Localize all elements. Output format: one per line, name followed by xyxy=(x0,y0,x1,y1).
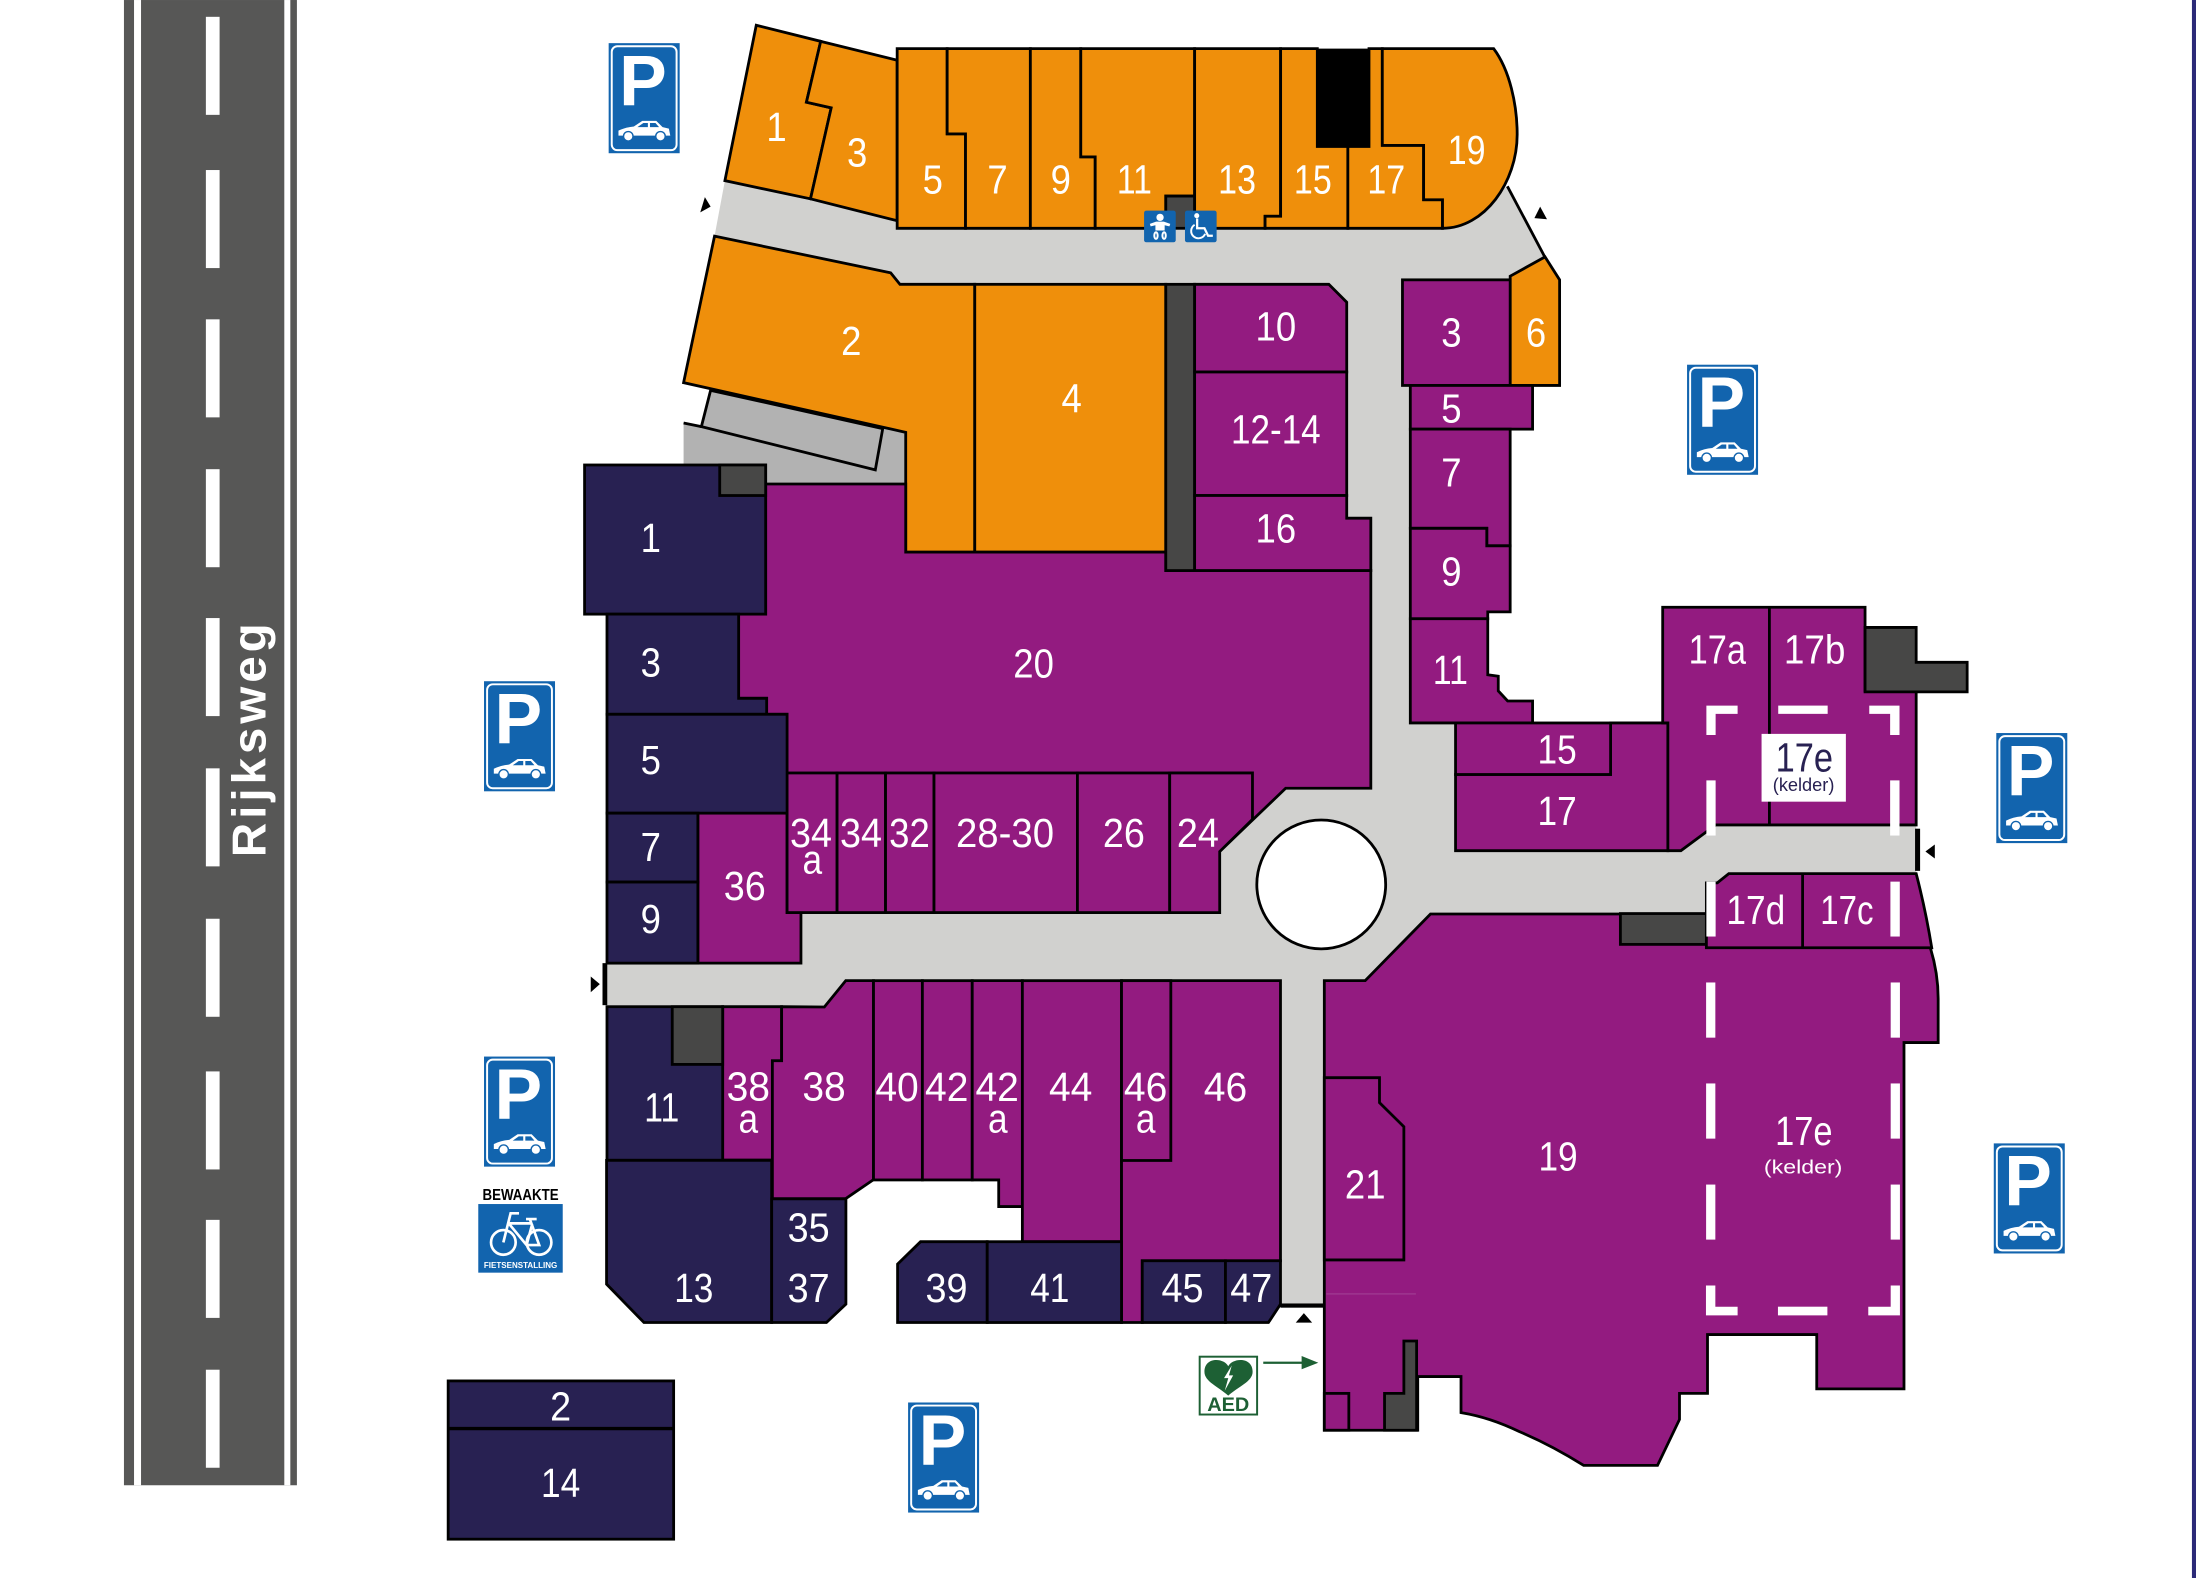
unit 42a xyxy=(972,981,1022,1207)
parking sign 7 xyxy=(908,1401,979,1513)
unit 7 west: 7 xyxy=(641,824,661,870)
small unit south xyxy=(1324,1393,1349,1430)
unit 5 east xyxy=(1410,385,1533,431)
unit 4 xyxy=(975,284,1166,552)
unit 21 xyxy=(1324,1078,1404,1260)
unit 15 east xyxy=(1456,723,1611,774)
unit 10 xyxy=(1195,284,1347,372)
unit 9 east: 9 xyxy=(1441,548,1462,594)
parking sign 5: P xyxy=(2007,731,2054,811)
unit 12-14: 12-14 xyxy=(1231,406,1321,452)
unit 9: 9 xyxy=(1051,156,1071,202)
parking sign 4: P xyxy=(495,1055,542,1135)
unit 11: 11 xyxy=(1117,156,1152,202)
AED sign: AED xyxy=(1207,1395,1249,1416)
unit 15: 15 xyxy=(1294,156,1332,202)
unit 39 xyxy=(898,1242,987,1323)
service block xyxy=(720,465,766,496)
faint seam xyxy=(1326,1293,1416,1295)
unit 3: 3 xyxy=(847,129,867,175)
unit 38 xyxy=(772,981,873,1199)
page edge line xyxy=(2192,0,2196,1578)
label box: 17e basement north xyxy=(1762,734,1846,802)
unit 11 east xyxy=(1410,619,1533,723)
unit 7: 7 xyxy=(987,156,1008,202)
icon: wheelchair xyxy=(1185,211,1217,242)
unit 17 east: 17 xyxy=(1537,788,1577,834)
unit 13 west xyxy=(607,1160,772,1323)
unit 19 south xyxy=(1324,914,1938,1465)
arrow: entrance west xyxy=(591,976,600,992)
unit 24 xyxy=(1170,773,1252,913)
unit 17 xyxy=(1348,49,1443,228)
unit 9 west: 9 xyxy=(641,896,661,942)
units 17d and 17c: 17c xyxy=(1820,887,1873,933)
unit 26 xyxy=(1077,773,1170,913)
unit 1 west: 1 xyxy=(641,515,661,561)
roundabout xyxy=(1257,820,1386,949)
unit 34 xyxy=(837,773,886,913)
road: Rijksweg xyxy=(124,0,297,1485)
service block south xyxy=(1385,1341,1417,1430)
arrow: entrance north-east xyxy=(1534,207,1547,219)
orange zone: north shops xyxy=(684,25,1560,552)
unit 15 xyxy=(1265,49,1348,228)
unit 21: 21 xyxy=(1345,1161,1386,1207)
unit 19: 19 xyxy=(1448,127,1486,173)
entrance bar south xyxy=(1280,1303,1324,1308)
road name: Rijksweg xyxy=(223,623,276,857)
parking sign 6: P xyxy=(2004,1142,2052,1222)
icon: baby care xyxy=(1144,211,1176,242)
guarded bicycle parking sign xyxy=(478,1187,563,1273)
unit 2 xyxy=(684,236,975,552)
service block north-east xyxy=(1865,627,1967,692)
unit 9 west xyxy=(607,882,698,963)
label box: 17e basement north: (kelder) xyxy=(1773,775,1834,795)
service block by 17d xyxy=(1620,914,1706,944)
unit 5: 5 xyxy=(923,156,943,202)
unit 1: 1 xyxy=(766,104,787,150)
toilets core xyxy=(1166,196,1195,228)
unit 40 xyxy=(873,981,922,1180)
dashed outline: 17e basement xyxy=(1706,706,1900,1315)
unit 44: 44 xyxy=(1049,1064,1092,1110)
arrow: AED direction xyxy=(1263,1356,1318,1369)
unit 45 xyxy=(1142,1261,1225,1323)
entrance bar west xyxy=(602,963,607,1005)
units 35 and 37: 37 xyxy=(788,1265,830,1311)
units 2 and 14 xyxy=(448,1381,674,1539)
parking sign 6 xyxy=(1994,1142,2065,1253)
label box: 17e basement north: 17e xyxy=(1776,734,1833,780)
unit 7 east: 7 xyxy=(1441,450,1462,496)
purple zone: central shops xyxy=(698,284,1371,1323)
unit 17: 17 xyxy=(1367,156,1405,202)
unit 17a and 17b block xyxy=(1663,607,1916,851)
unit 34a: a xyxy=(802,837,822,883)
unit 11 xyxy=(1081,49,1195,228)
unit 9 east xyxy=(1410,528,1510,619)
parking sign 5 xyxy=(1996,731,2067,843)
unit 34a xyxy=(787,773,837,913)
arrow: entrance east xyxy=(1925,845,1935,859)
unit 17a and 17b block: 17b xyxy=(1784,626,1845,672)
service column xyxy=(1166,284,1195,571)
unit 38a: 38 xyxy=(727,1064,770,1110)
unit 19 south: 19 xyxy=(1538,1133,1578,1179)
parking sign 3 xyxy=(484,680,555,791)
unit 28-30: 28-30 xyxy=(956,810,1054,856)
unit 47: 47 xyxy=(1230,1265,1272,1311)
unit 45: 45 xyxy=(1161,1265,1203,1311)
unit 46a: a xyxy=(1136,1096,1156,1142)
label: 17e basement south xyxy=(1764,1108,1842,1178)
service block south-west xyxy=(672,1007,723,1064)
unit 42 xyxy=(922,981,972,1180)
AED sign xyxy=(1200,1357,1257,1416)
unit 3 xyxy=(806,41,897,221)
unit 36 xyxy=(698,813,801,963)
unit 16 xyxy=(1195,496,1371,571)
walkway edge north-east xyxy=(1507,186,1545,257)
unit 11 west: 11 xyxy=(644,1085,679,1131)
unit 3 east xyxy=(1402,280,1510,385)
parking sign 2 xyxy=(1687,363,1758,475)
unit 4: 4 xyxy=(1062,375,1082,421)
navy zone: west shops xyxy=(448,465,1280,1539)
unit 5 west xyxy=(607,714,787,813)
unit 34: 34 xyxy=(840,810,882,856)
parking sign 2: P xyxy=(1698,363,1745,443)
units 35 and 37: 35 xyxy=(788,1205,830,1251)
unit 19 xyxy=(1382,49,1517,228)
unit 32: 32 xyxy=(889,810,930,856)
unit 41 xyxy=(987,1242,1122,1323)
unit 1 west xyxy=(585,465,766,614)
entrance bar east xyxy=(1915,829,1920,871)
unit 10: 10 xyxy=(1256,303,1296,349)
guarded bicycle parking sign: FIETSENSTALLING xyxy=(484,1260,557,1270)
unit 26: 26 xyxy=(1103,810,1145,856)
unit 28-30 xyxy=(934,773,1077,913)
unit 44 xyxy=(1022,981,1122,1242)
unit 34a: 34 xyxy=(790,810,832,856)
unit 38: 38 xyxy=(802,1064,846,1110)
service area xyxy=(684,390,906,484)
parking sign 4 xyxy=(484,1055,555,1167)
unit 42: 42 xyxy=(925,1064,968,1110)
black block xyxy=(1317,49,1369,147)
parking sign 3: P xyxy=(495,680,542,760)
unit 38a: a xyxy=(738,1096,758,1142)
unit 20: 20 xyxy=(1013,640,1054,686)
unit 15 east: 15 xyxy=(1537,726,1577,772)
unit 47 xyxy=(1225,1261,1280,1323)
unit 3 east: 3 xyxy=(1441,310,1462,356)
unit 6: 6 xyxy=(1526,310,1546,356)
walkways xyxy=(606,181,1916,1305)
unit 11 east: 11 xyxy=(1433,647,1468,693)
unit 36: 36 xyxy=(724,863,766,909)
unit 24: 24 xyxy=(1177,810,1219,856)
unit 39: 39 xyxy=(925,1265,967,1311)
unit 1 xyxy=(725,25,831,199)
unit 16: 16 xyxy=(1256,506,1296,552)
unit 3 west: 3 xyxy=(641,640,661,686)
units 2 and 14: 14 xyxy=(541,1460,580,1506)
unit 13: 13 xyxy=(1218,156,1256,202)
unit 13 west: 13 xyxy=(674,1265,713,1311)
unit 46: 46 xyxy=(1204,1064,1247,1110)
units 17d and 17c: 17d xyxy=(1726,887,1785,933)
unit 46a xyxy=(1122,981,1171,1160)
unit 5 west: 5 xyxy=(641,737,661,783)
parking sign 7: P xyxy=(919,1401,966,1481)
unit 5 xyxy=(897,49,966,228)
guarded bicycle parking sign: BEWAAKTE xyxy=(483,1187,559,1204)
units 17d and 17c xyxy=(1706,874,1932,948)
unit 32 xyxy=(886,773,934,913)
unit 41: 41 xyxy=(1030,1265,1069,1311)
units 35 and 37 xyxy=(772,1199,846,1323)
unit 2: 2 xyxy=(841,318,861,364)
unit 11 west xyxy=(607,1007,723,1160)
unit 46 xyxy=(1122,981,1280,1323)
unit 6 xyxy=(1510,257,1560,385)
unit 38a xyxy=(723,1007,782,1160)
label: 17e basement south: 17e xyxy=(1775,1108,1833,1154)
unit 20 xyxy=(739,484,1371,852)
units 2 and 14: 2 xyxy=(550,1384,571,1430)
arrow: entrance south xyxy=(1296,1313,1312,1323)
unit 46a: 46 xyxy=(1124,1064,1167,1110)
arrow: entrance north-west xyxy=(700,197,711,212)
unit 7 west xyxy=(607,813,698,882)
purple zone: east shops xyxy=(1324,280,1967,1465)
unit 7 xyxy=(947,49,1030,228)
unit 17a and 17b block: 17a xyxy=(1689,626,1746,672)
unit 5 east: 5 xyxy=(1441,385,1462,431)
unit 12-14 xyxy=(1195,372,1347,496)
unit 3 west xyxy=(607,614,767,714)
unit 7 east xyxy=(1410,429,1510,546)
unit 13 xyxy=(1195,49,1281,228)
unit 40: 40 xyxy=(875,1064,919,1110)
unit 42a: a xyxy=(988,1096,1008,1142)
unit 17 east xyxy=(1456,723,1668,851)
unit 42a: 42 xyxy=(975,1064,1019,1110)
parking sign 1: P xyxy=(619,41,667,121)
parking sign 1 xyxy=(609,41,680,153)
unit 9 xyxy=(1030,49,1095,228)
label: 17e basement south: (kelder) xyxy=(1764,1156,1842,1178)
